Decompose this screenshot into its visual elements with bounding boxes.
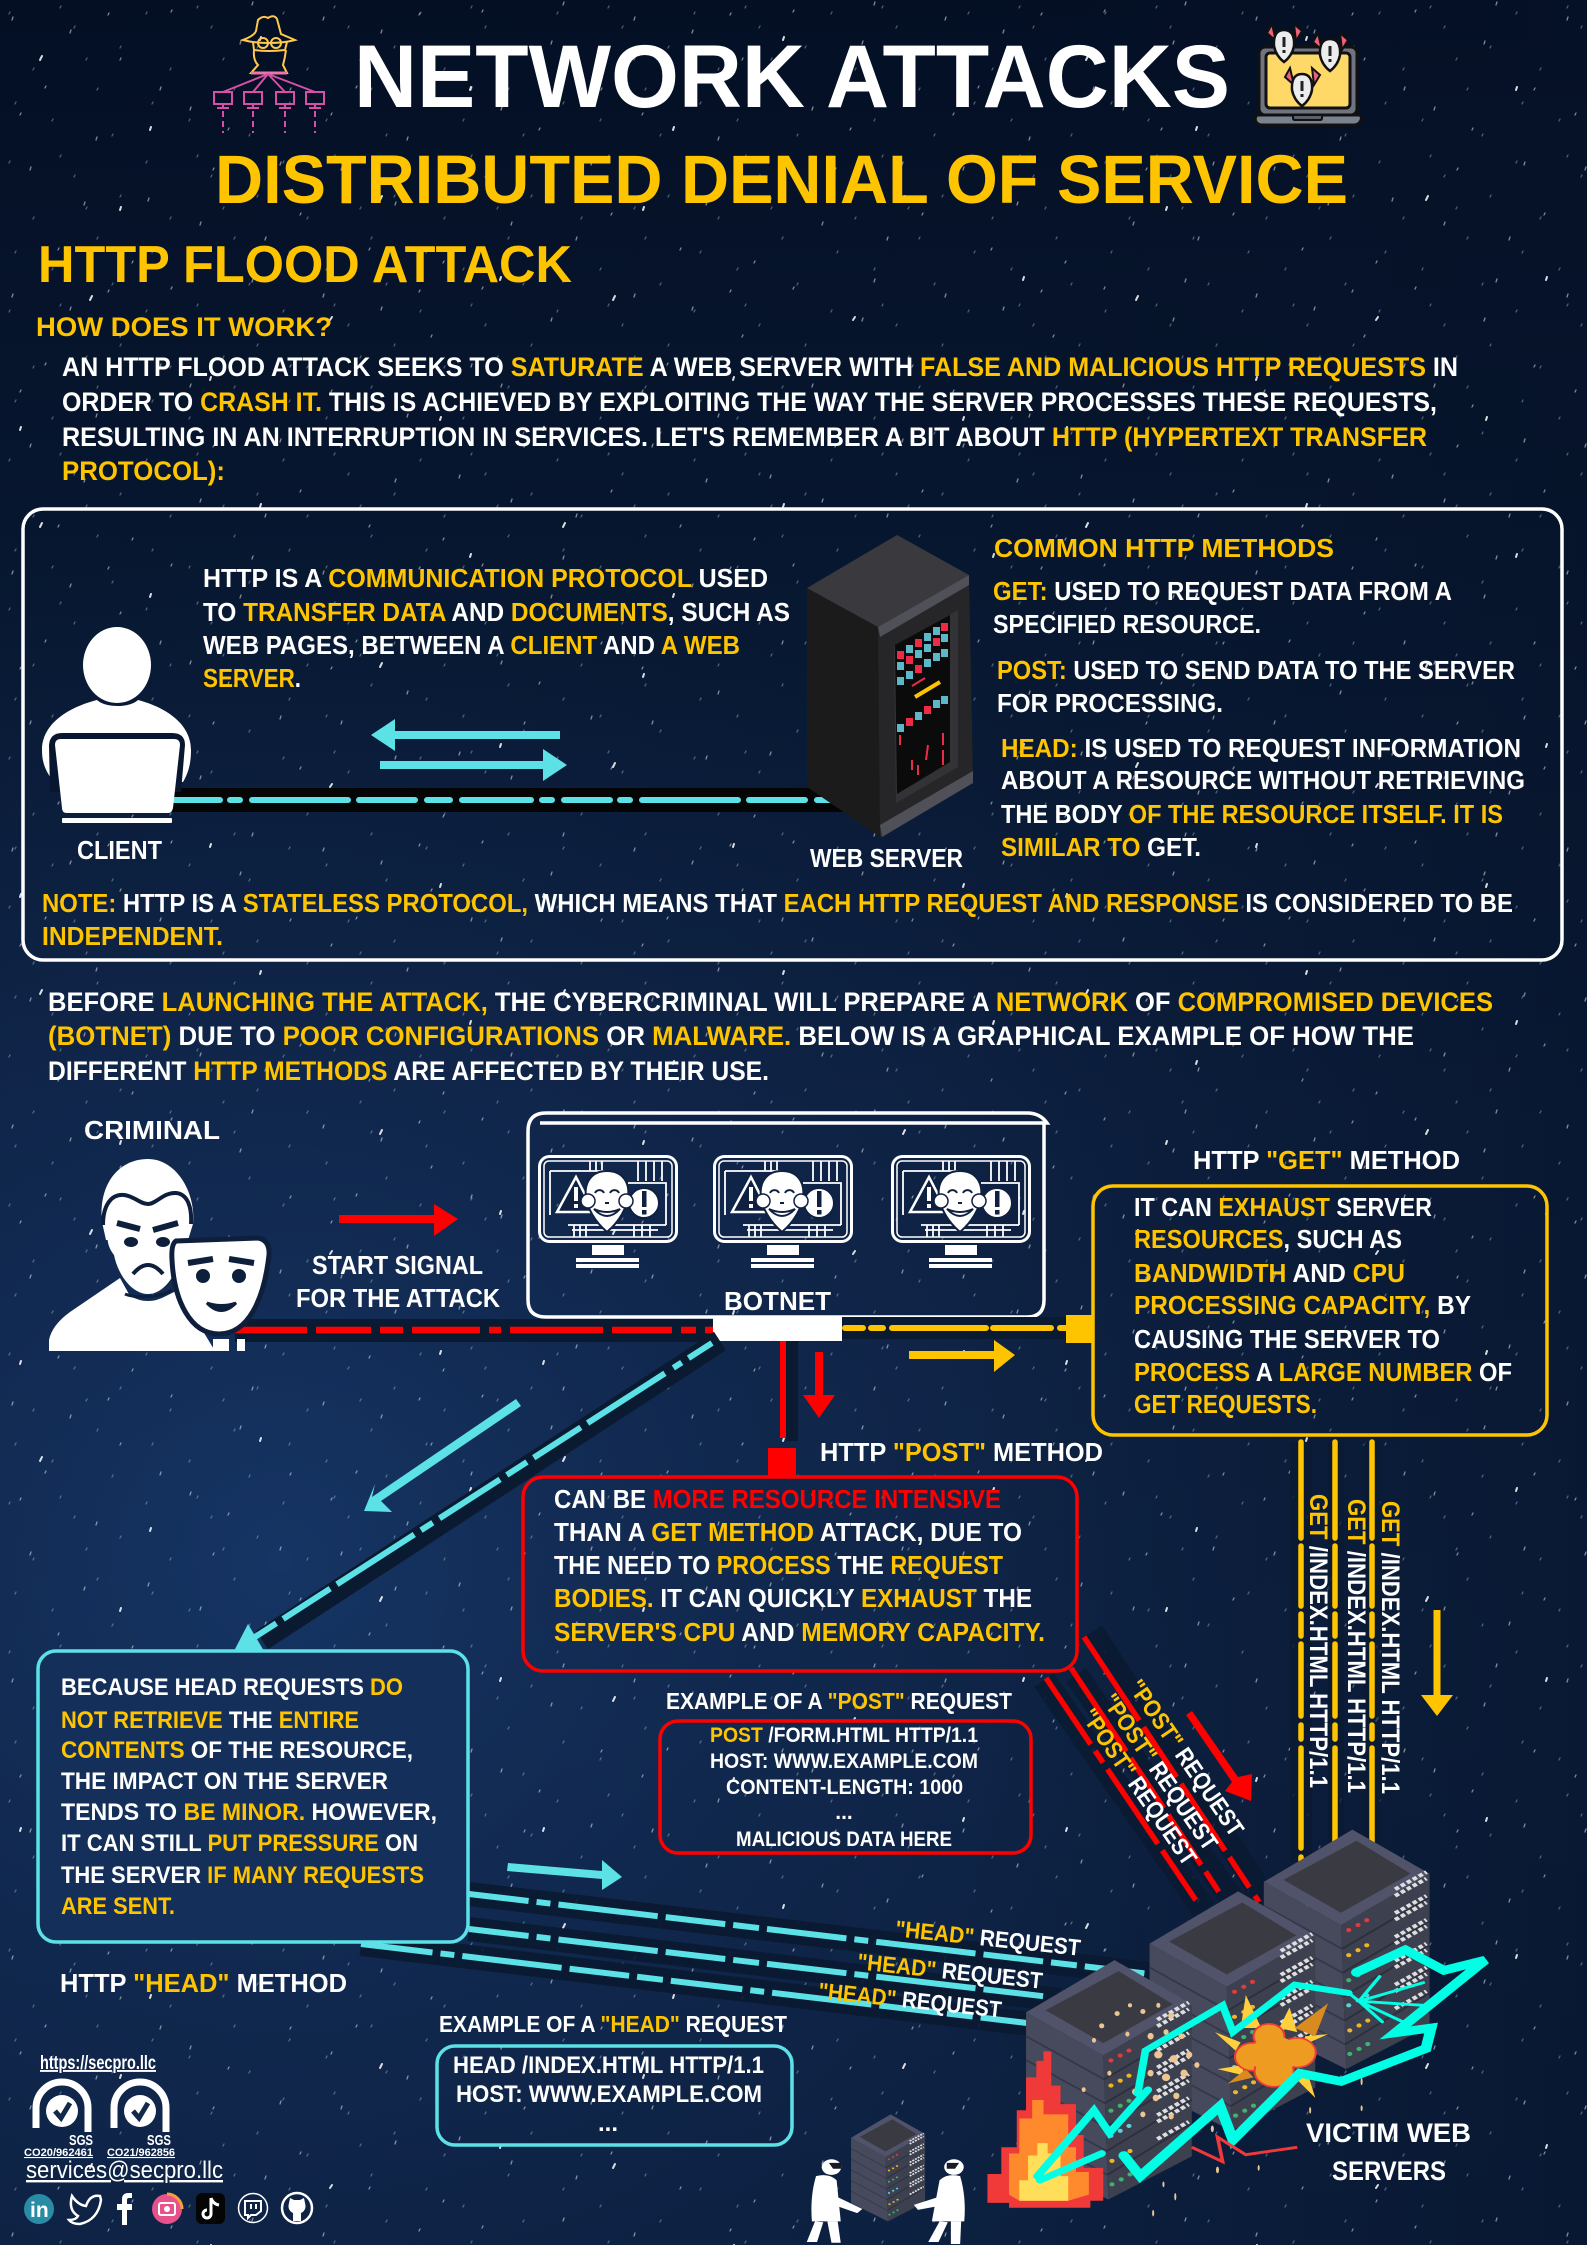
text: common http methods: ABOUT A RESOURCE WITHOUT RETRIEVING (1001, 765, 1525, 795)
intro paragraph: RESULTING IN AN INTERRUPTION IN SERVICES. LET'S REMEMBER A BIT ABOUT HTTP (HYPERTEXT TRANSFER (62, 422, 1427, 452)
panel: head method (38, 1651, 468, 1942)
subtitle: DISTRIBUTED DENIAL OF SERVICE (215, 141, 1348, 218)
label: victim web servers: SERVERS (1332, 2156, 1446, 2186)
footer: iso badges: CO20/962461 (24, 2147, 93, 2159)
connector: botnet to post box (768, 1341, 798, 1478)
panel: post method: CAN BE MORE RESOURCE INTENSIVE (554, 1484, 1001, 1514)
icon: client (42, 627, 191, 823)
panel: post method (523, 1477, 1077, 1671)
panel: head method: IT CAN STILL PUT PRESSURE ON (61, 1830, 418, 1857)
heading: how does it work: HOW DOES IT WORK? (36, 312, 332, 342)
text: common http methods (993, 533, 1525, 862)
lightning over fire (1037, 2090, 1148, 2180)
icon: laptop with alerts (1255, 24, 1362, 125)
heading: example post request: EXAMPLE OF A "POST" REQUEST (666, 1688, 1012, 1714)
text: common http methods: FOR PROCESSING. (997, 688, 1223, 718)
botnet hub (713, 1318, 842, 1341)
panel: head method: THE SERVER IF MANY REQUESTS (61, 1862, 424, 1889)
panel: botnet (528, 1113, 1047, 1341)
panel: post example: MALICIOUS DATA HERE (736, 1828, 952, 1851)
text: common http methods: HEAD: IS USED TO REQUEST INFORMATION (1001, 733, 1521, 763)
text: http definition (203, 563, 790, 693)
label: web server: WEB SERVER (810, 843, 963, 873)
footer: iso badges: CO21/962856 (107, 2147, 175, 2159)
icon: infected computers (540, 1156, 1030, 1268)
connector: client to server (170, 788, 870, 812)
text: http definition: WEB PAGES, BETWEEN A CLIENT AND A WEB (203, 630, 740, 660)
panel: head method: BECAUSE HEAD REQUESTS DO (61, 1674, 403, 1701)
label: victim web servers (1306, 2118, 1471, 2186)
intro paragraph: PROTOCOL): (62, 456, 225, 486)
text: before launching: DIFFERENT HTTP METHODS ARE AFFECTED BY THEIR USE. (48, 1056, 769, 1086)
panel: head method: TENDS TO BE MINOR. HOWEVER, (61, 1799, 437, 1826)
footer: social icons (24, 2193, 312, 2225)
text: note: NOTE: HTTP IS A STATELESS PROTOCOL, WHICH MEANS THAT EACH HTTP REQUEST AND RESPONSE IS CONSIDERED TO BE (42, 888, 1513, 918)
text: common http methods: SIMILAR TO GET. (1001, 832, 1201, 862)
arrow: get down (1421, 1610, 1453, 1716)
panel: get method: PROCESS A LARGE NUMBER OF (1134, 1357, 1512, 1387)
label: client: CLIENT (77, 835, 162, 865)
footer: iso badges: SGS (69, 2132, 93, 2149)
panel: get method: BANDWIDTH AND CPU (1134, 1258, 1405, 1288)
label: victim web servers: VICTIM WEB (1306, 2118, 1471, 2148)
panel: head method: NOT RETRIEVE THE ENTIRE (61, 1707, 359, 1734)
panel: post method: BODIES. IT CAN QUICKLY EXHAUST THE (554, 1583, 1032, 1613)
server stacks (1026, 1830, 1430, 2200)
panel: head example: ... (598, 2110, 618, 2137)
heading: http flood attack: HTTP FLOOD ATTACK (38, 236, 572, 294)
labels: head requests (817, 1915, 1082, 2023)
label: criminal: CRIMINAL (84, 1115, 220, 1145)
panel: post example: ... (835, 1801, 853, 1824)
panel: get method: IT CAN EXHAUST SERVER (1134, 1192, 1432, 1222)
arrow: get direction (909, 1340, 1015, 1372)
panel: post method: THE NEED TO PROCESS THE REQUEST (554, 1550, 1003, 1580)
heading: http post method: HTTP "POST" METHOD (820, 1437, 1103, 1467)
panel: post example: POST /FORM.HTML HTTP/1.1 (710, 1724, 978, 1747)
arrow: start signal (339, 1204, 458, 1236)
text: http definition: TO TRANSFER DATA AND DOCUMENTS, SUCH AS (203, 597, 790, 627)
panel: get method: RESOURCES, SUCH AS (1134, 1224, 1402, 1254)
labels: get requests: GET /INDEX.HTML HTTP/1.1 (1342, 1499, 1370, 1793)
panel: get method: CAUSING THE SERVER TO (1134, 1324, 1440, 1354)
panel: head method: THE IMPACT ON THE SERVER (61, 1768, 388, 1795)
label: start signal: FOR THE ATTACK (296, 1283, 500, 1313)
labels: post requests: "POST" REQUEST (1075, 1704, 1202, 1871)
text: before launching (48, 987, 1493, 1086)
text: http definition: HTTP IS A COMMUNICATION PROTOCOL USED (203, 563, 768, 593)
panel: head example: HOST: WWW.EXAMPLE.COM (456, 2081, 762, 2108)
connectors: head requests (361, 1894, 1150, 2024)
technicians (807, 2159, 965, 2244)
panel: get method (1093, 1186, 1547, 1435)
text: note: INDEPENDENT. (42, 921, 223, 951)
icon: criminal with mask (49, 1159, 269, 1351)
label: botnet: BOTNET (724, 1286, 831, 1316)
labels: head requests: "HEAD" REQUEST (894, 1915, 1082, 1961)
footer: iso badges (24, 2082, 175, 2159)
panel: http basics (23, 509, 1562, 960)
text: common http methods: POST: USED TO SEND DATA TO THE SERVER (997, 655, 1515, 685)
text: common http methods: SPECIFIED RESOURCE. (993, 609, 1261, 639)
heading: http head method: HTTP "HEAD" METHOD (60, 1968, 347, 1998)
panel: head method: ARE SENT. (61, 1893, 175, 1920)
panel: post example: CONTENT-LENGTH: 1000 (726, 1776, 963, 1799)
panel: get method: PROCESSING CAPACITY, BY (1134, 1290, 1471, 1320)
labels: head requests: "HEAD" REQUEST (856, 1948, 1044, 1994)
text: common http methods: THE BODY OF THE RESOURCE ITSELF. IT IS (1001, 799, 1503, 829)
labels: head requests: "HEAD" REQUEST (817, 1977, 1003, 2023)
text: note (42, 888, 1513, 951)
intro paragraph: ORDER TO CRASH IT. THIS IS ACHIEVED BY EXPLOITING THE WAY THE SERVER PROCESSES THESE REQUESTS, (62, 387, 1437, 417)
text: http definition: SERVER. (203, 663, 301, 693)
panel: post example (660, 1721, 1031, 1853)
connector: botnet to get box (842, 1315, 1093, 1343)
fire (987, 2051, 1103, 2208)
footer: website: https://secpro.llc (40, 2053, 156, 2074)
labels: post requests: "POST" REQUEST (1122, 1675, 1249, 1842)
footer: email: services@secpro.llc (26, 2157, 223, 2184)
arrow: head direction right (507, 1860, 622, 1890)
text: before launching: (BOTNET) DUE TO POOR CONFIGURATIONS OR MALWARE. BELOW IS A GRAPHICAL EXAMPLE OF HOW THE (48, 1021, 1414, 1051)
intro paragraph: AN HTTP FLOOD ATTACK SEEKS TO SATURATE A WEB SERVER WITH FALSE AND MALICIOUS HTTP REQUESTS IN (62, 352, 1458, 382)
heading: example head request: EXAMPLE OF A "HEAD" REQUEST (439, 2011, 787, 2037)
icon: web server rack (807, 535, 973, 837)
arrow: post direction (803, 1352, 835, 1418)
panel: get method: GET REQUESTS. (1134, 1389, 1317, 1419)
panel: head example: HEAD /INDEX.HTML HTTP/1.1 (453, 2052, 764, 2079)
title: NETWORK ATTACKS (354, 26, 1230, 126)
panel: post example: HOST: WWW.EXAMPLE.COM (710, 1750, 978, 1773)
labels: post requests: "POST" REQUEST (1096, 1689, 1223, 1856)
labels: get requests: GET /INDEX.HTML HTTP/1.1 (1376, 1501, 1404, 1794)
panel: post method: THAN A GET METHOD ATTACK, DUE TO (554, 1517, 1022, 1547)
arrow: head direction (364, 1399, 521, 1512)
labels: get requests: GET /INDEX.HTML HTTP/1.1 (1304, 1494, 1332, 1788)
small server rack (851, 2114, 925, 2221)
label: start signal: START SIGNAL (312, 1250, 483, 1280)
label: start signal (296, 1250, 500, 1313)
labels: get requests (1304, 1494, 1404, 1794)
text: common http methods: GET: USED TO REQUEST DATA FROM A (993, 576, 1452, 606)
panel: post method: SERVER'S CPU AND MEMORY CAPACITY. (554, 1617, 1045, 1647)
connectors: post requests (1044, 1632, 1266, 1910)
connector: botnet to head box (234, 1341, 720, 1651)
text: before launching: BEFORE LAUNCHING THE ATTACK, THE CYBERCRIMINAL WILL PREPARE A NETWORK OF COMPROMISED DEVICES (48, 987, 1493, 1017)
footer: social icons: in (30, 2199, 49, 2222)
connectors: get requests (1290, 1442, 1380, 1862)
footer: iso badges: SGS (147, 2132, 171, 2149)
intro paragraph (62, 352, 1458, 486)
lightning (1124, 1950, 1485, 2176)
panel: head example (437, 2046, 792, 2145)
debris (1082, 2003, 1363, 2216)
arrow: post diagonal (1186, 1711, 1252, 1801)
explosion (1215, 1995, 1328, 2098)
panel: head method: CONTENTS OF THE RESOURCE, (61, 1737, 413, 1764)
text: common http methods: COMMON HTTP METHODS (994, 533, 1334, 563)
illustration: victim web servers (807, 1830, 1485, 2244)
crack (1192, 2137, 1297, 2162)
icon: hacker with botnet (214, 16, 324, 133)
connector: criminal to botnet (190, 1319, 713, 1342)
arrows: request and response (371, 719, 567, 781)
heading: http get method: HTTP "GET" METHOD (1193, 1145, 1460, 1175)
